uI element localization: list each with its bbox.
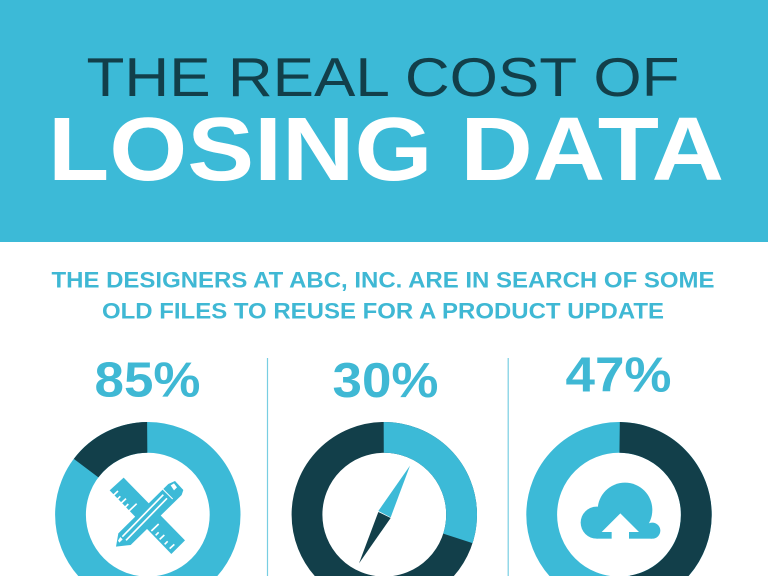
header banner [0,0,768,242]
stat: 85%: 85% [94,354,200,408]
icon: ruler and pencil [110,478,185,554]
stat: 47%: 47% [566,348,672,402]
subheading: OLD FILES TO REUSE FOR A PRODUCT UPDATE [102,298,664,324]
title line 1: THE REAL COST OF [86,46,680,108]
stat: 30%: 30% [332,354,438,408]
title line 2: LOSING DATA [48,100,724,200]
icon: cloud upload [581,483,660,541]
subheading [52,268,714,324]
icon: compass needle [359,466,410,563]
donut chart: 85% [70,437,225,576]
donut chart: 47% [540,436,698,576]
donut chart: 30% [307,437,462,576]
subheading: THE DESIGNERS AT ABC, INC. ARE IN SEARCH OF SOME [52,268,714,292]
